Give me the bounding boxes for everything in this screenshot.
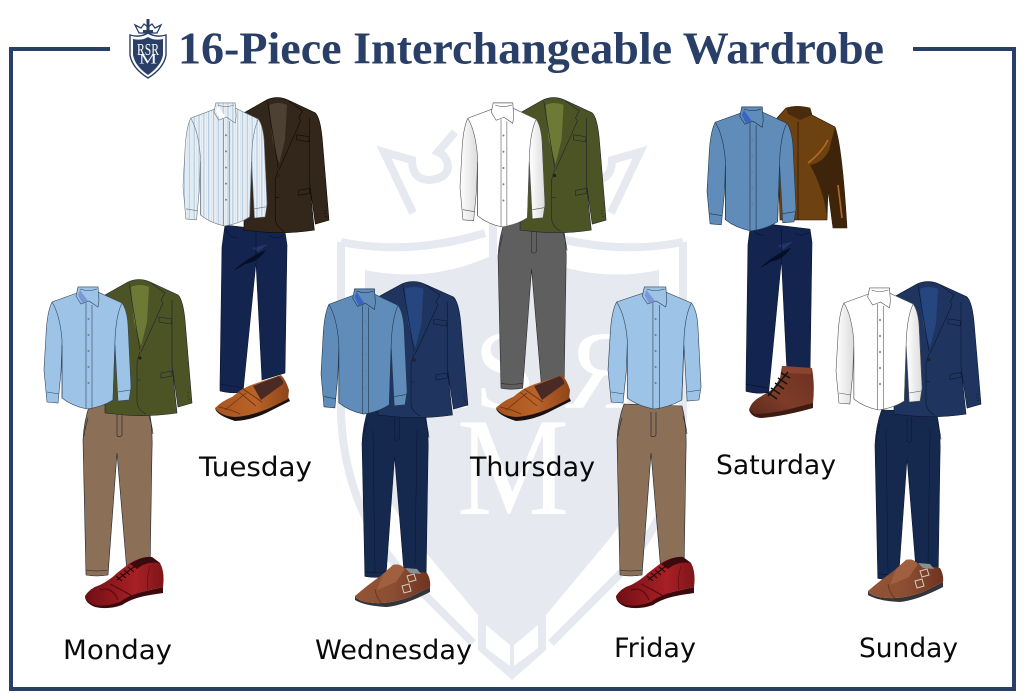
burgundy oxford shoes <box>85 557 164 608</box>
logo crest <box>130 19 166 78</box>
watermark monogram: M <box>457 390 569 545</box>
trouser creases <box>886 430 930 572</box>
label: Wednesday: Wednesday <box>315 635 472 666</box>
mid-blue shirt <box>707 107 796 231</box>
striped shirt <box>183 103 267 226</box>
logo crown <box>135 24 161 33</box>
label: Monday: Monday <box>63 635 172 666</box>
navy trousers <box>362 408 429 577</box>
brown monk strap shoes <box>355 564 430 607</box>
navy blazer <box>894 282 981 417</box>
white shirt <box>460 103 545 227</box>
logo monogram: RSR <box>137 40 159 59</box>
logo shield inner <box>133 37 163 75</box>
gray trousers <box>498 221 567 389</box>
outfit: Sunday <box>836 282 981 602</box>
watermark monogram <box>392 309 640 545</box>
label: Thursday: Thursday <box>469 452 595 483</box>
outfit: Tuesday <box>183 98 329 421</box>
navy blazer <box>378 282 468 418</box>
watermark monogram: R <box>565 309 640 433</box>
outfit: Monday <box>44 280 192 608</box>
burgundy oxford shoes <box>616 557 695 608</box>
title: 16-Piece Interchangeable Wardrobe <box>178 24 884 74</box>
outfit: Wednesday <box>321 282 468 607</box>
watermark monogram: R <box>392 309 467 433</box>
background watermark crest <box>341 132 683 680</box>
label: Sunday: Sunday <box>859 633 958 664</box>
khaki trousers <box>83 404 153 576</box>
trouser creases <box>373 430 417 572</box>
logo shield <box>130 33 166 78</box>
brown monk strap shoes <box>868 560 943 602</box>
brown leather boots <box>749 366 814 418</box>
watermark tail pockets <box>486 625 538 666</box>
outfit: Friday <box>608 287 701 608</box>
brown loafers <box>496 375 571 421</box>
navy trousers <box>875 410 941 579</box>
logo monogram <box>137 40 159 68</box>
logo sword <box>143 19 153 33</box>
watermark monogram: S <box>474 309 536 433</box>
watermark crown <box>384 132 640 213</box>
watermark shield outline <box>341 222 683 643</box>
brown loafers <box>215 375 290 421</box>
logo monogram: M <box>139 52 157 68</box>
light blue shirt <box>608 287 701 409</box>
dark brown blazer <box>244 98 329 233</box>
label: Saturday: Saturday <box>716 450 836 481</box>
brown leather jacket <box>777 106 847 228</box>
watermark shield fill <box>365 255 659 680</box>
label: Tuesday: Tuesday <box>198 452 312 483</box>
olive blazer <box>105 280 192 416</box>
outfit: Thursday <box>460 98 606 421</box>
outfit: Saturday <box>707 106 847 418</box>
navy jeans <box>746 222 812 393</box>
olive blazer <box>520 98 606 233</box>
navy jeans <box>220 225 287 393</box>
label: Friday: Friday <box>614 633 696 664</box>
white shirt <box>836 288 922 410</box>
light blue shirt <box>44 287 131 409</box>
khaki trousers <box>617 404 687 576</box>
mid-blue shirt <box>321 289 407 414</box>
